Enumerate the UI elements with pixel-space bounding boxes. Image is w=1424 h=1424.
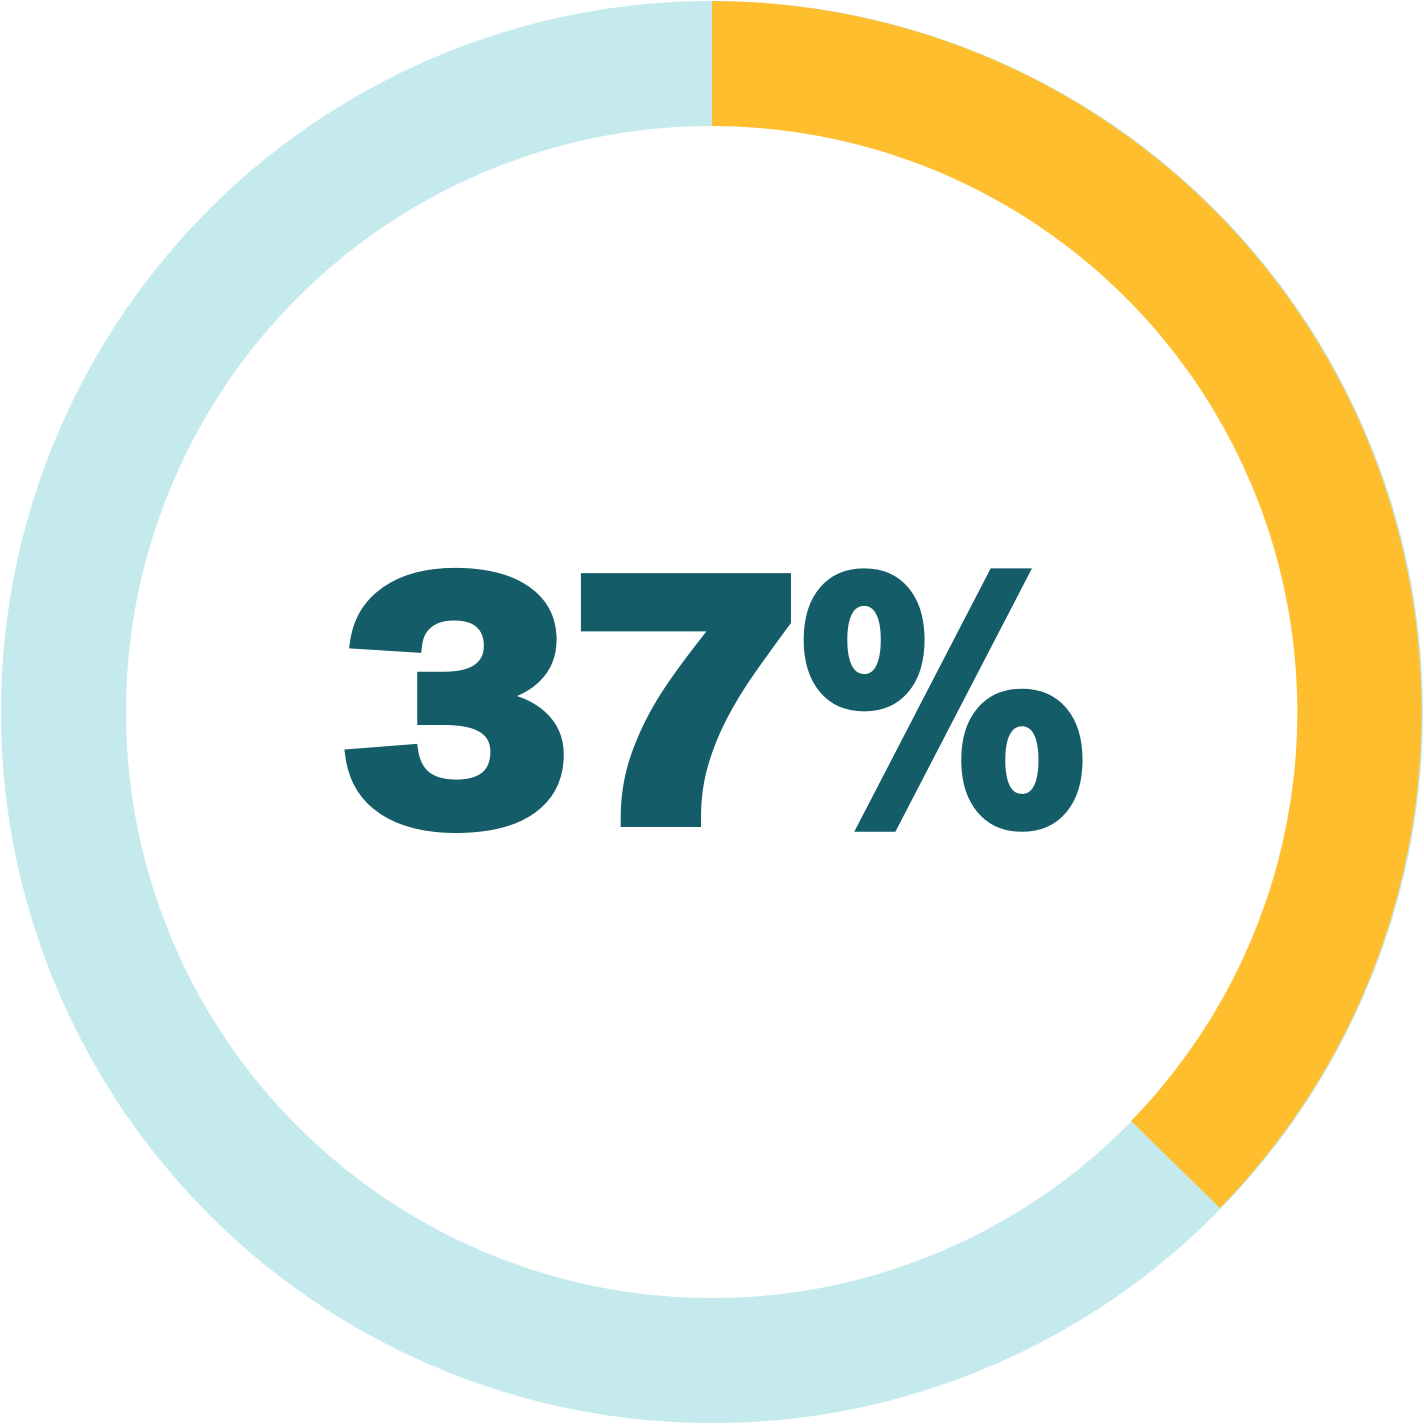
value label: 37%: 7 (576, 510, 797, 890)
value label: 37%: % (799, 511, 1087, 901)
donut segment: 37% (712, 1, 1422, 1208)
value label: 37% (344, 502, 1087, 901)
value label: 37%: 3 (344, 502, 570, 897)
